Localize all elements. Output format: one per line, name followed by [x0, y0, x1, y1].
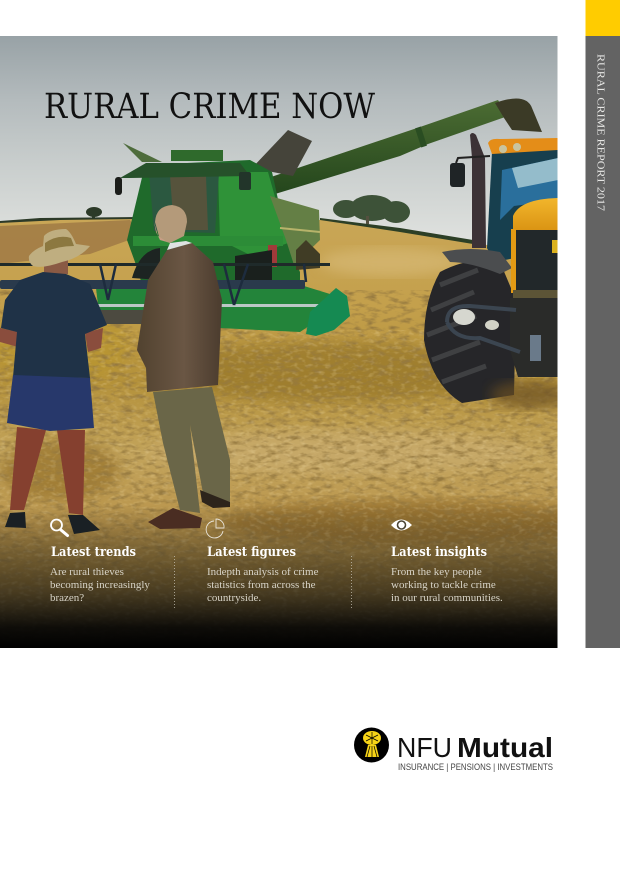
photo fade to black [0, 505, 558, 649]
copy: latest trends: Are rural thieves [50, 566, 124, 578]
cab window [149, 173, 219, 233]
hat [29, 229, 90, 267]
icon: pie chart [206, 519, 224, 538]
copy: latest insights: working to tackle crime [391, 579, 496, 591]
column: latest figures [206, 519, 319, 604]
legs [10, 427, 85, 515]
yellow corner tab [586, 0, 620, 36]
heading: latest insights: Latest insights [391, 545, 487, 560]
head [155, 205, 187, 243]
cab roof [120, 163, 250, 178]
trousers [153, 387, 230, 513]
wordmark: NFU [397, 732, 452, 763]
machine body [127, 160, 300, 280]
dotted divider [350, 556, 352, 609]
shoes [148, 508, 202, 529]
copy: latest trends: brazen? [50, 592, 84, 604]
copy: latest insights: From the key people [391, 566, 482, 578]
exhaust stack [470, 133, 486, 248]
mirror [450, 156, 490, 187]
grain tank flap [252, 130, 312, 176]
copy: latest insights: in our rural communities. [391, 592, 503, 604]
hill field [0, 219, 558, 648]
header divider tip [306, 288, 350, 336]
dotted divider [174, 556, 176, 609]
column: latest insights [391, 520, 503, 604]
copy: latest trends: becoming increasingly [50, 579, 150, 591]
spine title: RURAL CRIME REPORT 2017 [594, 54, 606, 212]
tractor [424, 133, 570, 409]
tyre [424, 260, 516, 403]
arms [0, 328, 103, 352]
logo: NFU Mutual: Mutual [457, 732, 553, 763]
grey spine band [586, 36, 620, 648]
header [0, 263, 330, 266]
copy: latest figures: countryside. [207, 592, 261, 604]
icon: wheat sheaf badge [354, 728, 389, 762]
unloading auger [268, 99, 542, 194]
t-shirt [1, 272, 107, 378]
red extinguisher [268, 245, 277, 267]
stubble texture [0, 290, 558, 604]
bonnet [513, 198, 558, 232]
front chassis and bull bar [510, 298, 558, 377]
front tyres [132, 248, 160, 280]
sky [0, 36, 558, 251]
tractor cab [487, 148, 558, 262]
mudguard [442, 249, 512, 274]
logo: NFU Mutual [354, 728, 553, 772]
man in straw hat [0, 229, 107, 534]
strapline: INSURANCE | PENSIONS | INVESTMENTS [398, 762, 553, 772]
heading: RURAL CRIME NOW [44, 87, 376, 127]
combine harvester [0, 99, 542, 336]
panel: cover photo [0, 36, 558, 648]
heading: latest figures: Latest figures [207, 545, 296, 560]
icon: magnifying glass [51, 520, 68, 536]
shorts [7, 375, 94, 431]
column: latest trends [50, 520, 150, 604]
jacket [137, 243, 222, 392]
man in tweed jacket [137, 205, 230, 529]
shirt collar [167, 241, 192, 250]
distant trees [0, 195, 473, 246]
heading: latest trends: Latest trends [51, 545, 136, 560]
copy: latest figures: Indepth analysis of crime [207, 566, 319, 578]
icon: eye [391, 520, 412, 530]
neck [44, 260, 68, 274]
boots [5, 512, 100, 534]
copy: latest figures: statistics from across the [207, 579, 316, 591]
